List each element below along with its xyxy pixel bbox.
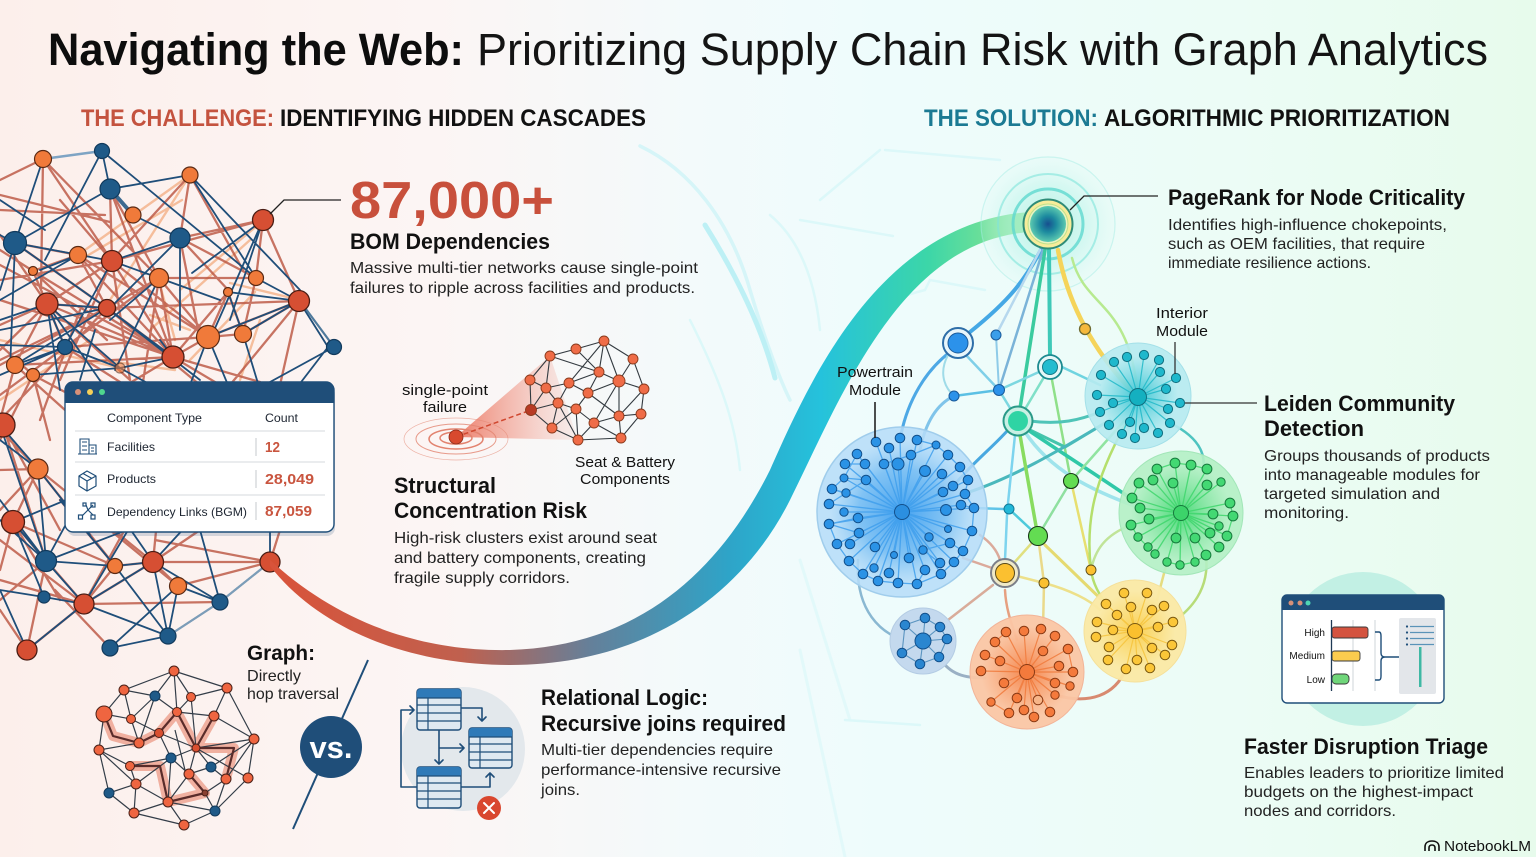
text block: leiden community detection: Groups thousands of products [1264,448,1490,465]
table card: component counts: 87,059 [265,504,312,520]
cluster: orange community [970,615,1084,729]
text block: pagerank [1168,185,1466,272]
table 3 [417,767,461,808]
cluster: green community [1119,451,1243,575]
graph traversal network [94,666,259,830]
label: single-point failure [402,382,489,416]
label: seat and battery components [575,454,676,488]
text block: pagerank: Identifies high-influence chokepoints, [1168,217,1447,234]
heading: the solution [924,105,1450,132]
stat: 87,000+ BOM dependencies [350,172,699,297]
table card: component counts [65,382,335,536]
versus badge: vs. [309,730,353,765]
icon: dependency links [78,503,95,519]
text block: faster disruption triage: Faster Disruption Triage [1244,734,1488,759]
cluster: powertrain module [817,427,987,597]
text block: relational logic: Relational Logic: [541,685,708,710]
callout leader: leiden [1185,402,1257,404]
nodes: orange [6,150,264,594]
label: single-point failure: single-point [402,382,489,399]
text block: relational logic: joins. [540,782,580,799]
triage dashboard illustration: Low [1307,675,1326,686]
text block: graph direct hop traversal: Graph: [247,642,315,665]
text block: pagerank: such as OEM facilities, that require [1168,236,1425,253]
label: interior module: Module [1156,323,1208,340]
table card: component counts: 12 [265,440,280,456]
triage dashboard illustration: Medium [1289,651,1325,662]
notebooklm mark: NotebookLM [1444,839,1531,855]
text block: leiden community detection: Detection [1264,416,1364,441]
icon: facilities [78,439,97,454]
stat: 87,000+ BOM dependencies: Massive multi-tier networks cause single-point [350,260,699,277]
text block: structural concentration risk: and battery components, creating [394,550,646,567]
text block: faster disruption triage: budgets on the highest-impact [1244,784,1474,801]
triage dashboard illustration [1282,572,1444,726]
failure node [449,430,463,444]
text block: graph direct hop traversal [247,642,339,703]
stat: 87,000+ BOM dependencies: BOM Dependencies [350,229,550,254]
side panel [1399,618,1436,694]
text block: relational logic: Recursive joins required [541,711,786,736]
cluster: yellow community [1084,580,1186,682]
heading: the solution: ALGORITHMIC PRIORITIZATION [1104,105,1450,132]
text block: leiden community detection: targeted simulation and [1264,486,1440,503]
stat: 87,000+ BOM dependencies: failures to ripple across facilities and products. [350,280,695,297]
table card: component counts: Facilities [107,440,155,454]
mid-level connector nodes [943,324,1096,588]
title: Prioritizing Supply Chain Risk with Graph Analytics [477,24,1488,75]
faint background circuit lines [640,146,1000,857]
table card: component counts: 28,049 [265,472,314,488]
text block: structural concentration risk: Structural [394,473,496,498]
text block: structural concentration risk: High-risk clusters exist around seat [394,530,658,547]
ripples [404,418,508,460]
stat: 87,000+ BOM dependencies: 87,000+ [350,172,554,230]
table card: component counts: Count [265,411,299,425]
text block: leiden community detection: Leiden Community [1264,391,1456,416]
callout leader: pagerank [1070,196,1158,210]
error badge [477,796,501,820]
text block: faster disruption triage: Enables leaders to prioritize limited [1244,765,1504,782]
failure cone [456,356,578,440]
text block: relational logic: performance-intensive recursive [541,762,781,779]
hub node: pagerank [1024,200,1072,248]
table card: component counts: Dependency Links (BGM) [107,505,247,519]
label: powertrain module [837,364,913,438]
versus badge [293,660,368,829]
nodes: red [0,210,310,660]
label: powertrain module: Powertrain [837,364,913,381]
table card: component counts: Component Type [107,411,202,425]
title: Navigating the Web: [48,24,464,75]
heading: the solution: THE SOLUTION: [924,105,1098,132]
network graph: hidden cascades [0,144,342,660]
table 2 [469,728,512,768]
icon: relational tables with recursive joins [401,687,525,820]
table 1 [417,689,461,730]
text block: faster disruption triage [1244,734,1504,820]
icon: products box [79,471,96,491]
text block: relational logic: Multi-tier dependencies require [541,742,773,759]
text block: structural concentration risk: fragile supply corridors. [394,570,570,587]
label: seat and battery components: Components [580,471,670,488]
text block: leiden community detection: into manageable modules for [1264,467,1481,484]
text block: faster disruption triage: nodes and corridors. [1244,803,1396,820]
heading: the challenge: IDENTIFYING HIDDEN CASCADES [280,105,646,132]
cascade ribbon [270,212,1030,665]
diagram: single-point failure and seat and battery cluster [404,336,649,460]
label: seat and battery components: Seat & Battery [575,454,676,471]
text block: structural concentration risk [394,473,658,587]
label: interior module [1156,305,1208,374]
callout leader: 87,000+ [270,200,341,214]
label: powertrain module: Module [849,382,901,399]
text block: relational logic [540,685,786,799]
cluster: small blue community [890,608,956,674]
text block: graph direct hop traversal: hop traversal [247,686,339,703]
triage dashboard illustration: High [1304,628,1325,639]
text block: graph direct hop traversal: Directly [247,668,301,685]
hub halo rings [981,157,1115,291]
table card: component counts: Products [107,472,156,486]
community wires [858,248,1207,699]
nodes: blue [4,144,342,656]
text block: pagerank: PageRank for Node Criticality [1168,185,1466,210]
text block: structural concentration risk: Concentration Risk [394,498,588,523]
text block: leiden community detection [1264,391,1490,522]
priority bars [1332,627,1368,684]
label: single-point failure: failure [423,399,467,416]
community graph [817,157,1243,729]
text block: leiden community detection: monitoring. [1264,505,1349,522]
bracket and arrow [1375,632,1415,680]
heading: the challenge: THE CHALLENGE: [81,105,274,132]
label: interior module: Interior [1156,305,1208,322]
text block: pagerank: immediate resilience actions. [1168,255,1371,272]
heading: the challenge [81,105,646,132]
cluster: interior module [1085,343,1191,449]
